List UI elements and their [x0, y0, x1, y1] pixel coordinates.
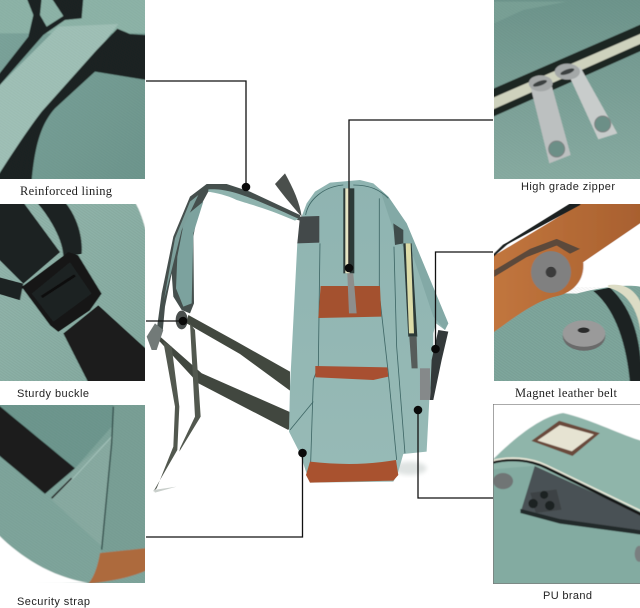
label: Security strap: Security strap	[17, 596, 90, 608]
label: Reinforced lining: Reinforced lining	[20, 184, 113, 198]
callout: reinforced lining leader	[146, 81, 250, 191]
label: PU brand: PU brand	[543, 590, 592, 602]
panel: sturdy buckle detail photo	[0, 204, 145, 381]
side magnet strap	[430, 330, 448, 400]
panel: high grade zipper detail photo	[494, 0, 640, 179]
panel: reinforced lining detail photo	[0, 0, 145, 179]
panel: PU brand detail photo	[493, 404, 640, 584]
panel: security strap detail photo	[0, 405, 145, 583]
side zipper	[403, 243, 430, 400]
panel: magnet leather belt detail photo	[494, 204, 640, 381]
zipper pull	[347, 273, 357, 313]
label: Magnet leather belt: Magnet leather belt	[515, 386, 618, 400]
callout: sturdy buckle leader	[146, 317, 187, 325]
callout: magnet leather belt leader	[431, 252, 493, 353]
leather patch	[318, 286, 381, 318]
dark flap shadow	[393, 223, 403, 245]
label: High grade zipper: High grade zipper	[521, 181, 615, 193]
backpack side view	[147, 173, 448, 493]
bottom leather	[306, 460, 398, 483]
lower straps and buckle	[147, 311, 297, 493]
shoulder strap	[157, 173, 302, 332]
body seams	[290, 185, 405, 463]
label: Sturdy buckle: Sturdy buckle	[17, 388, 89, 400]
callout: high grade zipper leader	[345, 120, 493, 272]
floor shadow	[393, 462, 427, 475]
bag body	[289, 180, 448, 483]
main zipper	[343, 188, 354, 273]
flap	[380, 189, 448, 330]
callout: security strap leader	[146, 449, 307, 537]
top handle patch	[297, 216, 319, 243]
callout: PU brand leader	[414, 406, 493, 498]
pocket trim	[315, 366, 388, 380]
